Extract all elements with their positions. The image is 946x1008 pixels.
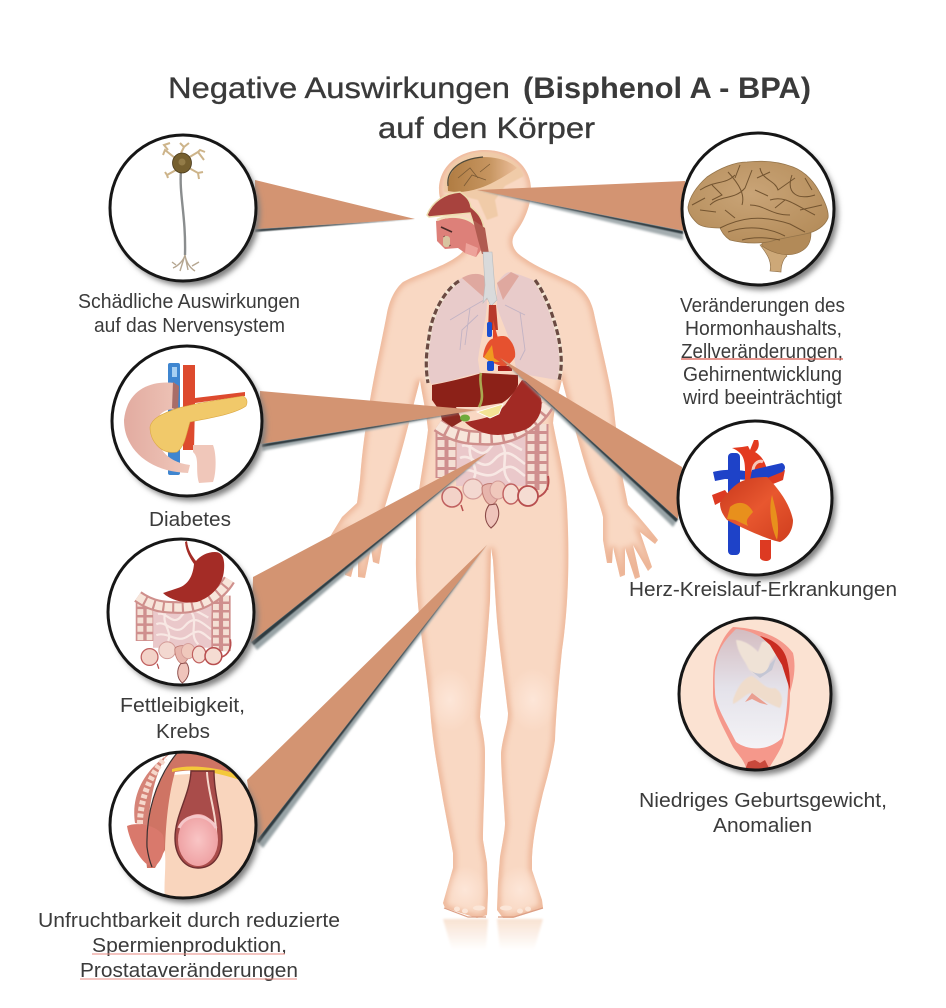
icon: neuron (163, 143, 205, 271)
wedge: pancreas (260, 391, 477, 451)
label: diabetes: Diabetes (149, 508, 231, 531)
trachea (483, 252, 497, 306)
wedge: reproductive (247, 545, 487, 848)
panel: fetus circle (679, 618, 836, 775)
label: infertility: Prostataveränderungen (80, 959, 298, 982)
label: birth weight: Niedriges Geburtsgewicht, (639, 789, 887, 812)
dark tissue under liver (438, 405, 462, 427)
label: hormone balance: wird beeinträchtigt (682, 386, 842, 409)
body silhouette (330, 150, 658, 918)
panel: pancreas circle (112, 346, 266, 501)
wedge: nervous system (255, 180, 415, 232)
label: cardiovascular: Herz-Kreislauf-Erkrankungen (629, 578, 897, 601)
label: hormone balance: Veränderungen des (680, 294, 845, 317)
label: obesity, cancer: Fettleibigkeit, (120, 694, 245, 717)
label: obesity, cancer (120, 694, 245, 743)
panel: intestine circle (108, 539, 258, 690)
label: hormone balance: Gehirnentwicklung (683, 363, 842, 386)
wedge: brain (477, 181, 685, 240)
icon: stomach and intestines (138, 541, 231, 683)
title: auf den Körper (378, 112, 595, 145)
lungs (426, 272, 562, 384)
panel: brain circle (682, 133, 838, 290)
label: infertility (38, 909, 340, 982)
icon: pancreas (124, 363, 247, 483)
toes (444, 906, 543, 917)
label: obesity, cancer: Krebs (156, 720, 210, 743)
icon: reproductive anatomy (127, 752, 260, 900)
label: hormone balance (680, 294, 845, 409)
label: hormone balance: Hormonhaushalts, (685, 317, 842, 340)
label: hormone balance: Zellveränderungen, (681, 340, 843, 363)
mouth and throat (436, 217, 489, 257)
icon: brain (688, 161, 828, 272)
panel: reproductive circle (110, 752, 260, 903)
panel: neuron circle (110, 135, 260, 286)
nasal cavity (427, 192, 484, 234)
title: (Bisphenol A - BPA) (523, 72, 811, 105)
label: birth weight: Anomalien (713, 814, 812, 837)
gallbladder and bile duct (460, 373, 503, 422)
label: nervous system: Schädliche Auswirkungen (78, 290, 300, 313)
skull band and brain (444, 152, 524, 220)
title: Negative Auswirkungen (168, 72, 510, 105)
human body figure (330, 150, 658, 944)
heart in torso (483, 305, 515, 371)
icon: uterus and fetus (713, 627, 795, 772)
panel: heart circle (678, 421, 836, 580)
icon: heart (712, 440, 793, 561)
wedge: heart (500, 358, 682, 527)
label: infertility: Unfruchtbarkeit durch reduzierte (38, 909, 340, 932)
stomach (465, 380, 542, 435)
liver (432, 373, 518, 407)
label: birth weight (639, 789, 887, 837)
label: nervous system (78, 290, 300, 337)
intestines in torso (438, 405, 549, 528)
wedge: intestines (251, 453, 487, 650)
callout wedges (247, 180, 685, 848)
title (168, 72, 811, 145)
label: infertility: Spermienproduktion, (92, 934, 287, 957)
foot reflections (443, 919, 543, 950)
label: nervous system: auf das Nervensystem (94, 314, 285, 337)
